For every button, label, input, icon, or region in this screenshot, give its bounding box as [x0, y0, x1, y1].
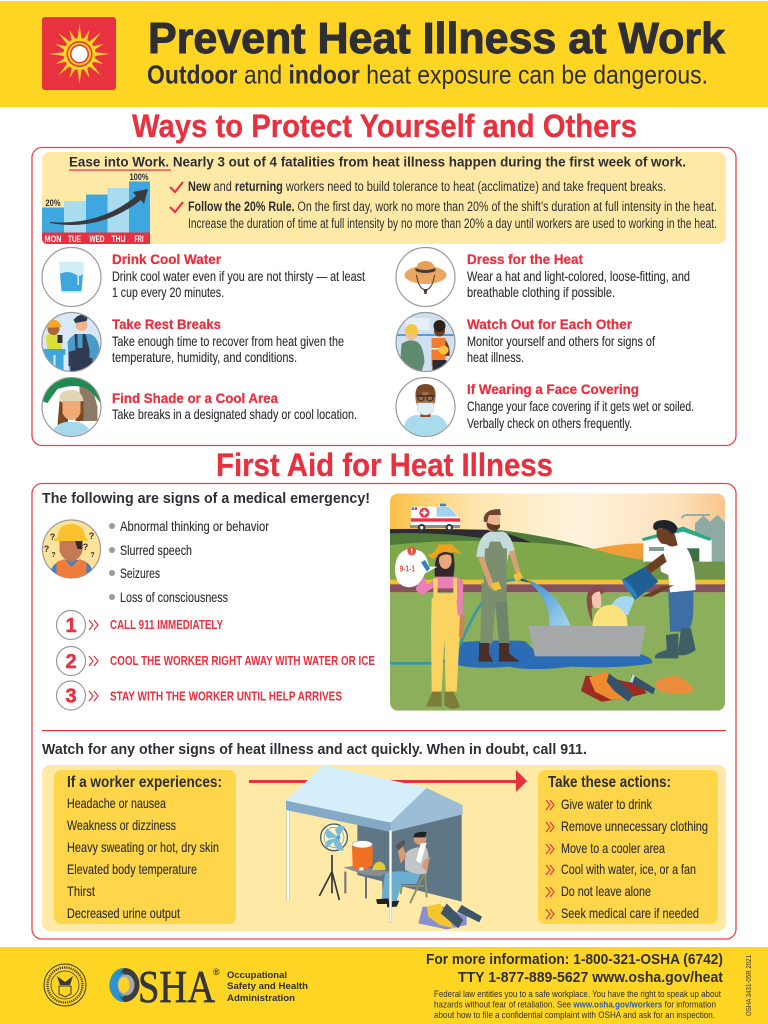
footer banner	[0, 947, 768, 1024]
step 3: STAY WITH THE WORKER UNTIL HELP ARRIVES	[110, 688, 342, 704]
box: take these actions: Do not leave alone	[561, 883, 651, 899]
chart: ramp up week: TUE	[68, 234, 81, 245]
fan	[319, 824, 347, 900]
logo: OSHA: ®	[213, 967, 220, 977]
text: legal notice: hazards without fear of retaliation. See www.osha.gov/workers for information	[434, 1000, 716, 1010]
illustration detail: water puddle	[444, 640, 652, 669]
item: dress for the heat: Wear a hat and light-colored, loose-fitting, and	[467, 268, 690, 284]
step 2	[56, 646, 375, 676]
item: watch out: heat illness.	[467, 349, 524, 365]
clothes and boots	[418, 903, 482, 929]
logo: OSHA	[110, 961, 220, 1012]
box: if a worker experiences: If a worker experiences:	[67, 774, 222, 791]
chart: ramp up week: 20%	[46, 198, 60, 208]
step 1	[56, 610, 223, 640]
item: drink cool water: Drink cool water even if you are not thirsty — at least	[112, 268, 365, 284]
item: watch out	[396, 312, 655, 372]
chart: ramp up week: WED	[90, 234, 105, 245]
item: watch out: Monitor yourself and others for signs of	[467, 333, 655, 349]
icon: worker with mask	[396, 378, 455, 437]
heading: watch for other signs: Watch for any other signs of heat illness and act quickly. When in doubt, call 911.	[42, 741, 587, 758]
icon: straw hat	[396, 248, 455, 306]
box: take these actions: Seek medical care if needed	[561, 905, 699, 921]
icon: water glass	[42, 248, 101, 306]
subtitle: Outdoor and indoor heat exposure can be dangerous.	[147, 60, 708, 90]
illustration: rest tent	[286, 765, 482, 929]
box: take these actions	[538, 770, 718, 924]
item: rest breaks	[42, 312, 344, 372]
item: shade: Take breaks in a designated shady or cool location.	[112, 406, 357, 422]
text: publication code: OSHA 3431-05R 2021	[746, 955, 753, 1016]
item: dress for the heat: breathable clothing if possible.	[467, 284, 615, 300]
icon: confused worker: ?	[83, 542, 88, 552]
heading: ways to protect: Ways to Protect Yourself and Others	[132, 108, 637, 144]
text: agency name: Administration	[227, 993, 295, 1004]
illustration detail: tub and person	[528, 587, 646, 656]
text: contact info	[426, 951, 723, 986]
step 2: COOL THE WORKER RIGHT AWAY WITH WATER OR ICE	[110, 653, 375, 668]
chart: ramp up week: 100%	[130, 172, 148, 182]
item: drink cool water: Drink Cool Water	[112, 251, 222, 267]
icon: check	[170, 202, 183, 212]
box: if a worker experiences: Decreased urine output	[67, 905, 180, 921]
box: if a worker experiences	[54, 770, 236, 924]
chart: ramp up week: MON	[44, 234, 62, 245]
item: dress for the heat: Dress for the Heat	[467, 251, 583, 267]
list: emergency signs: Loss of consciousness	[120, 589, 228, 605]
icon: workers resting	[42, 312, 101, 372]
text: legal notice: Federal law entitles you to a safe workplace. You have the right to speak up about	[434, 989, 721, 1000]
heading: medical emergency: The following are signs of a medical emergency!	[42, 490, 370, 507]
box: if a worker experiences: Heavy sweating or hot, dry skin	[67, 839, 219, 855]
item: shade: Find Shade or a Cool Area	[112, 390, 278, 406]
logo: OSHA: SHA	[138, 961, 215, 1012]
illustration detail: woman with bucket	[621, 520, 696, 658]
text: legal notice	[434, 989, 721, 1021]
item: face covering: Change your face covering if it gets wet or soiled.	[467, 398, 694, 414]
text: agency name: Occupational	[227, 970, 287, 981]
heading: first aid: First Aid for Heat Illness	[216, 447, 553, 483]
illustration detail: man with hose	[476, 509, 529, 662]
divider	[42, 730, 726, 731]
step 2: 2	[65, 651, 77, 673]
step 1: CALL 911 IMMEDIATELY	[110, 617, 223, 632]
title: Prevent Heat Illness at Work	[148, 14, 726, 63]
item: drink cool water: 1 cup every 20 minutes.	[112, 284, 224, 300]
box: take these actions: Give water to drink	[561, 796, 653, 812]
list: emergency signs: Seizures	[120, 565, 160, 581]
arrow: rising trend	[50, 189, 148, 225]
item: rest breaks: temperature, humidity, and conditions.	[112, 349, 297, 365]
step 3	[56, 681, 342, 710]
icon: confused worker: ?	[89, 531, 94, 541]
illustration detail: water spray	[529, 580, 570, 626]
text: contact info: TTY 1-877-889-5627 www.osha.gov/heat	[458, 969, 723, 986]
header banner	[0, 1, 768, 107]
item: dress for the heat	[396, 248, 690, 306]
illustration: first aid scene	[390, 493, 725, 711]
item: face covering: Verbally check on others frequently.	[467, 415, 632, 431]
illustration detail: woman on phone: 9-1-1	[400, 563, 415, 573]
box: take these actions: Remove unnecessary clothing	[561, 818, 708, 834]
list: emergency signs: Slurred speech	[120, 542, 192, 558]
step 3: 3	[65, 686, 77, 708]
table and cooler	[343, 841, 389, 898]
text: agency name: Safety and Health	[227, 981, 308, 992]
icon: confused worker: ?	[50, 532, 55, 542]
text: agency name	[227, 970, 308, 1004]
icon: check	[170, 182, 183, 192]
panel: ease into work	[42, 152, 726, 245]
box: if a worker experiences: Thirst	[67, 883, 95, 899]
panel: ways to protect	[32, 148, 736, 446]
text: legal notice: about how to file a confidential complaint with OSHA and ask for an inspection.	[434, 1010, 715, 1021]
box: take these actions: Take these actions:	[548, 774, 671, 791]
icon: worker under tree	[42, 377, 102, 437]
chart: ramp up week: FRI	[134, 234, 144, 245]
panel: first aid	[32, 484, 736, 939]
item: rest breaks: Take enough time to recover from heat given the	[112, 333, 344, 349]
box: if a worker experiences: Headache or nausea	[67, 795, 166, 811]
text: ease into work: Ease into Work. Nearly 3 out of 4 fatalities from heat illness happen during the first week of work.	[69, 154, 686, 170]
illustration detail: barn and silo	[642, 515, 725, 562]
illustration detail: discarded clothes and boots	[581, 672, 694, 702]
box: if a worker experiences: Elevated body temperature	[67, 861, 197, 877]
text: contact info: For more information: 1-800-321-OSHA (6742)	[426, 951, 723, 968]
icon: department of labor seal	[44, 964, 86, 1006]
item: rest breaks: Take Rest Breaks	[112, 316, 221, 332]
box: if a worker experiences: Weakness or dizziness	[67, 817, 176, 833]
arrow: symptoms to actions	[249, 770, 527, 792]
resting worker	[376, 832, 430, 907]
list: emergency signs: Abnormal thinking or behavior	[120, 518, 269, 534]
icon: confused worker: ?	[44, 544, 49, 554]
illustration detail: woman on phone	[395, 544, 465, 709]
item: face covering	[396, 378, 694, 437]
icon: confused worker	[42, 520, 100, 579]
chart: ramp up week: THU	[112, 234, 126, 245]
icon: coworkers	[396, 312, 456, 372]
item: face covering: If Wearing a Face Covering	[467, 381, 639, 397]
box: take these actions: Move to a cooler area	[561, 840, 665, 856]
icon: sun	[42, 17, 116, 90]
list: emergency signs	[109, 518, 269, 605]
item: shade	[42, 377, 357, 437]
step 1: 1	[65, 615, 77, 637]
item: drink cool water	[42, 248, 365, 306]
panel: symptoms and actions	[42, 765, 726, 931]
illustration detail: ambulance	[410, 504, 460, 531]
icon: confused worker: ?	[51, 552, 56, 559]
text: new and returning: New and returning workers need to build tolerance to heat (acclimatize) and take frequent breaks.	[188, 179, 666, 194]
icon: confused worker: ?	[90, 552, 95, 559]
illustration detail: hose	[390, 579, 525, 663]
chart: ramp up week	[42, 172, 150, 245]
item: watch out: Watch Out for Each Other	[467, 316, 633, 332]
box: take these actions: Cool with water, ice, or a fan	[561, 861, 696, 877]
